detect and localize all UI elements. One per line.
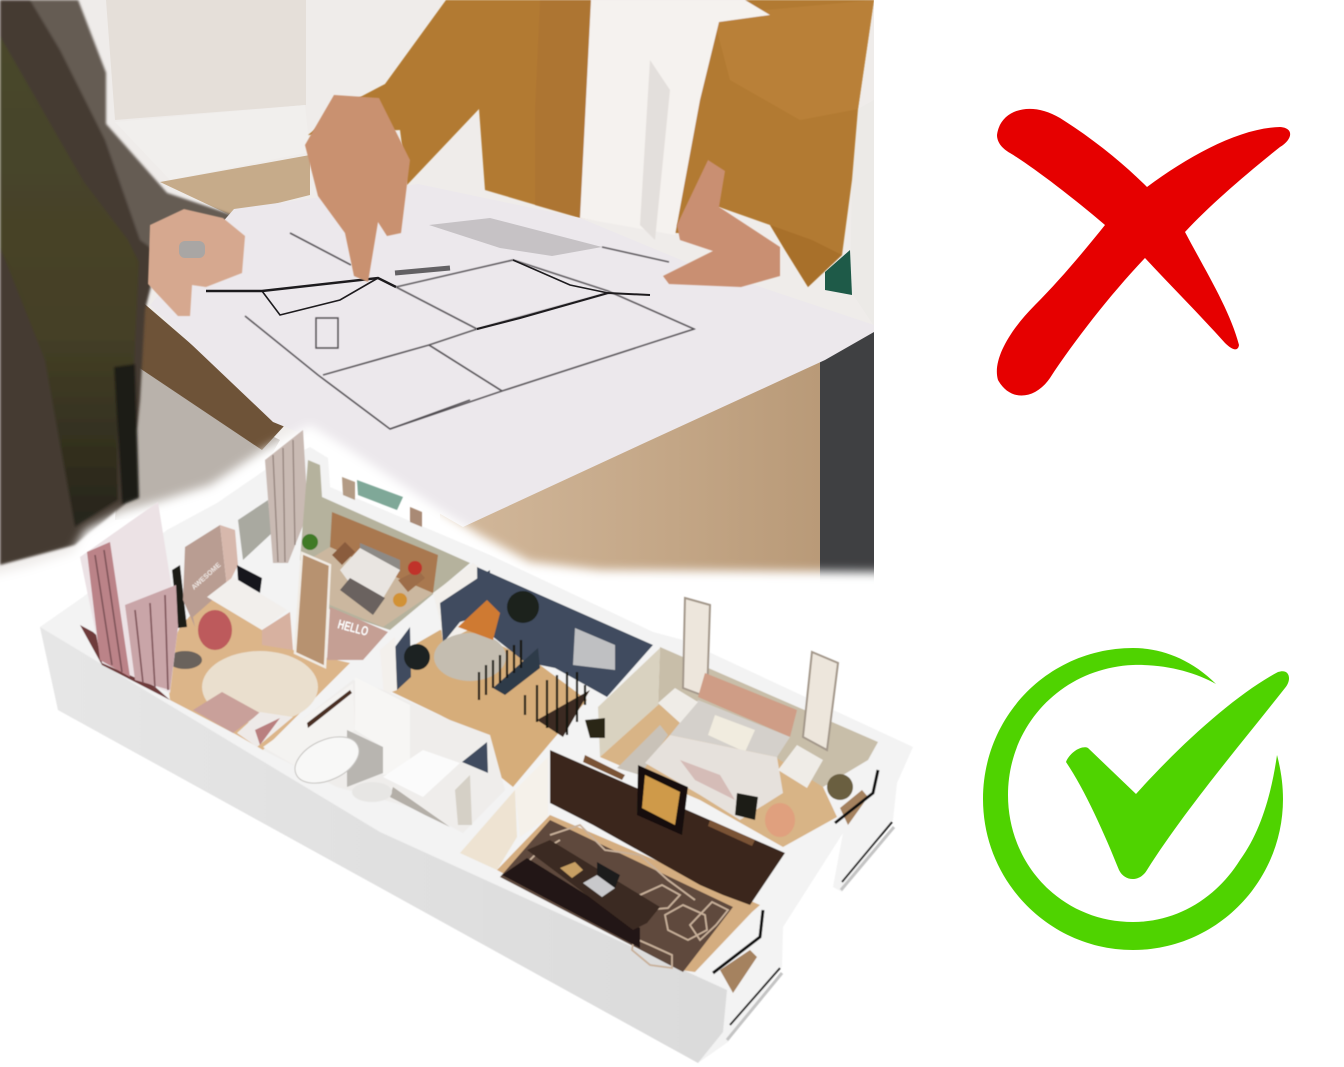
orange chair <box>458 600 500 640</box>
side table <box>168 651 202 669</box>
front wall face <box>40 627 727 1063</box>
wall frames and shelf <box>342 477 422 527</box>
bathtub <box>288 728 366 792</box>
desk with laptop <box>502 840 660 948</box>
balconies <box>713 770 894 1040</box>
standing mirror <box>295 553 330 667</box>
room: pink bedroom <box>80 500 350 750</box>
3D floor plan <box>40 430 913 1063</box>
curtains <box>80 430 308 693</box>
pink wall with sign: AWESOME <box>191 562 223 591</box>
icon: red cross <box>997 109 1290 396</box>
stair railing <box>479 640 585 735</box>
icon: green check in circle <box>983 648 1289 950</box>
desk with monitor <box>207 565 293 650</box>
photo: two people reviewing a paper floor plan <box>0 0 874 590</box>
ring <box>179 241 205 258</box>
bed <box>645 673 797 820</box>
hexagon rug <box>500 820 733 972</box>
bed <box>340 543 400 615</box>
room: stair hall <box>380 563 653 787</box>
room: master bedroom <box>598 598 878 847</box>
pink chair <box>198 610 232 650</box>
wall panels <box>683 598 838 750</box>
grey wardrobe alcove <box>238 500 272 560</box>
room: office <box>460 718 785 972</box>
room: upper bedroom <box>295 460 470 667</box>
left person <box>0 0 230 566</box>
gallery frames <box>573 628 615 670</box>
paper floor plan sheet <box>188 202 874 527</box>
HELLO wall <box>327 607 388 660</box>
pink wall with sign <box>183 525 238 627</box>
daybed <box>193 692 293 747</box>
room: bathroom <box>263 677 505 833</box>
HELLO wall: HELLO <box>336 616 370 639</box>
white fade around photo base <box>0 0 1344 700</box>
outer white block <box>40 447 913 1063</box>
mustard jacket person <box>308 0 874 287</box>
hands <box>148 95 780 316</box>
dark wood partition <box>550 718 785 905</box>
